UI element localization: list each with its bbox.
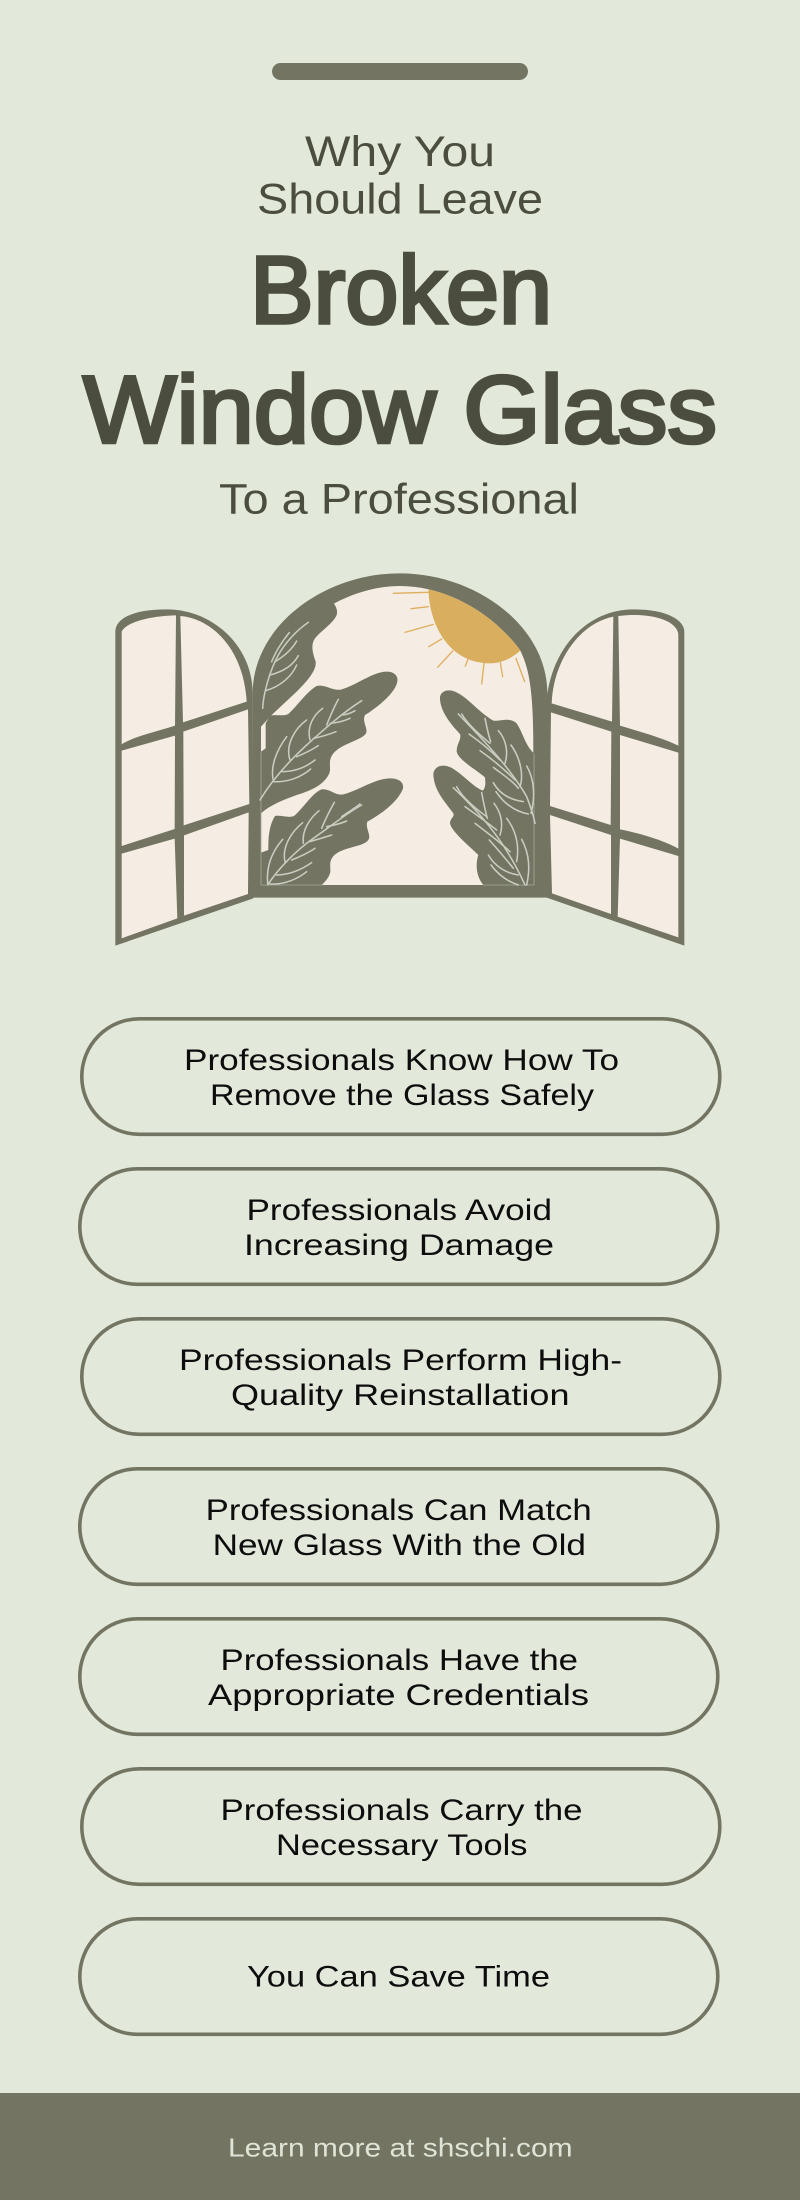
footer band [0,2093,800,2200]
central arched frame [253,573,548,898]
reason text: Quality Reinstallation [231,1379,570,1412]
title line: Window Glass: Window Glass [83,356,717,464]
title line: Why You: Why You [305,128,495,176]
pill outline [82,1319,720,1434]
reason text: Professionals Can Match [206,1494,592,1527]
pill outline [80,1169,718,1284]
footer text: Learn more at shschi.com [228,2133,573,2163]
title line: To a Professional: To a Professional [219,476,579,524]
reason 5 [80,1619,718,1734]
reason text: Professionals Avoid [246,1194,552,1227]
reason text: Professionals Know How To [184,1044,619,1077]
leaves on the right [433,690,535,885]
left window sash [115,609,253,946]
sun [393,580,525,684]
pill outline [82,1019,720,1134]
reason text: Professionals Perform High- [179,1344,622,1377]
reason text: Appropriate Credentials [208,1679,589,1712]
reason 3 [82,1319,720,1434]
pill outline [80,1919,718,2034]
top bar [272,63,528,80]
reason 1 [82,1019,720,1134]
title line: Should Leave: Should Leave [257,176,543,224]
reason 2 [80,1169,718,1284]
reason text: Professionals Carry the [220,1794,582,1827]
leaves on the left [257,599,403,885]
title line: Broken: Broken [250,237,552,344]
pill outline [80,1469,718,1584]
reason 4 [80,1469,718,1584]
pill outline [82,1769,720,1884]
reason text: Professionals Have the [220,1644,578,1677]
reason text: Increasing Damage [244,1229,554,1262]
reason 7 [80,1919,718,2034]
reason text: Necessary Tools [276,1829,528,1862]
pill outline [80,1619,718,1734]
reason text: Remove the Glass Safely [210,1079,594,1112]
reason text: New Glass With the Old [213,1529,586,1562]
footer [0,2093,800,2200]
reason 6 [82,1769,720,1884]
right window sash [546,609,684,946]
title [83,128,717,524]
illustration: open window with leaves and sun [115,573,684,946]
reason text: You Can Save Time [247,1961,550,1994]
